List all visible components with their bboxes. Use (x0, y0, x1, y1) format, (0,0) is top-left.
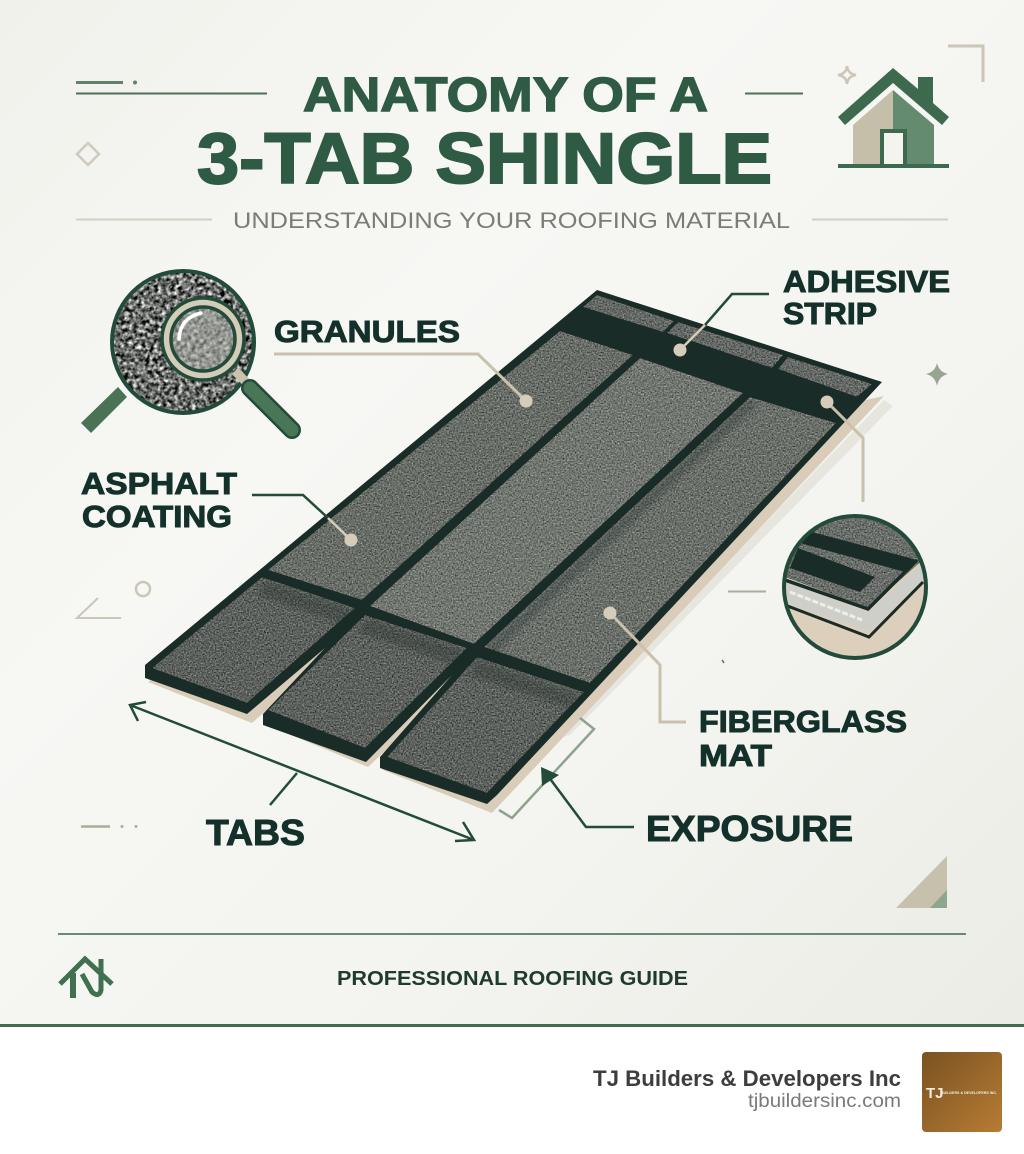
callout: fiberglass mat: FIBERGLASS (699, 704, 907, 739)
title line 2: 3-TAB SHINGLE (197, 120, 772, 199)
tan underlay (148, 396, 884, 813)
lower tab 3 (387, 657, 584, 793)
company logo: TJ (926, 1085, 944, 1102)
corner triangle decoration (896, 856, 947, 908)
callout: asphalt coating (81, 466, 358, 546)
title line 1: ANATOMY OF A (303, 69, 708, 122)
top granule surface (786, 518, 920, 607)
company name: TJ Builders & Developers Inc (593, 1066, 901, 1091)
callout: adhesive strip: STRIP (783, 296, 877, 331)
upper field left (268, 331, 633, 600)
icon: magnifier over granules (112, 271, 292, 430)
callout: exposure: EXPOSURE (646, 808, 853, 849)
dark band (800, 532, 917, 572)
callout: adhesive strip (674, 264, 950, 502)
lower tab 1 (152, 577, 355, 703)
shingle body (145, 290, 882, 804)
magnified granule disc (112, 271, 254, 413)
upper field right (484, 397, 836, 683)
callout: granules (274, 314, 532, 408)
soft drop shadow (555, 400, 893, 740)
callout: tabs with dimension arrow (130, 702, 474, 853)
icon: small monogram house (60, 959, 112, 998)
title block (197, 69, 790, 233)
callout: fiberglass mat: MAT (699, 738, 772, 773)
lower tab 2 (268, 615, 467, 748)
callout: granules: GRANULES (274, 314, 460, 349)
fibreglass layer (787, 563, 923, 632)
shingle illustration (145, 290, 893, 813)
brand band (0, 1024, 1024, 1154)
icon: green bar (81, 387, 127, 433)
magnifier lens (162, 298, 244, 380)
callout: asphalt coating: COATING (82, 499, 232, 534)
bottom dark edge (785, 582, 923, 637)
magnifier handle (235, 371, 292, 430)
exposure bracket (499, 718, 594, 818)
top granule segment right (778, 357, 872, 397)
footer rule (58, 933, 966, 935)
upper field centre (370, 358, 743, 644)
inset: layer cross-section (786, 518, 924, 656)
callout: tabs with dimension arrow: TABS (206, 812, 305, 853)
top dark edge (785, 560, 917, 609)
footer caption: PROFESSIONAL ROOFING GUIDE (337, 968, 688, 990)
top granule segment left (583, 295, 674, 332)
icon: house (838, 68, 949, 168)
subtitle: UNDERSTANDING YOUR ROOFING MATERIAL (233, 208, 790, 233)
top granule segment centre (667, 322, 783, 368)
company logo (922, 1052, 1002, 1132)
callout: asphalt coating: ASPHALT (81, 466, 237, 501)
inset ring (784, 516, 926, 658)
callout: fiberglass mat (604, 606, 907, 773)
callout: exposure (541, 767, 853, 849)
company url: tjbuildersinc.com (748, 1090, 901, 1112)
callout: adhesive strip: ADHESIVE (783, 264, 950, 299)
company logo: BUILDERS & DEVELOPERS INC. (941, 1091, 997, 1095)
adhesive strip detail (790, 548, 875, 592)
